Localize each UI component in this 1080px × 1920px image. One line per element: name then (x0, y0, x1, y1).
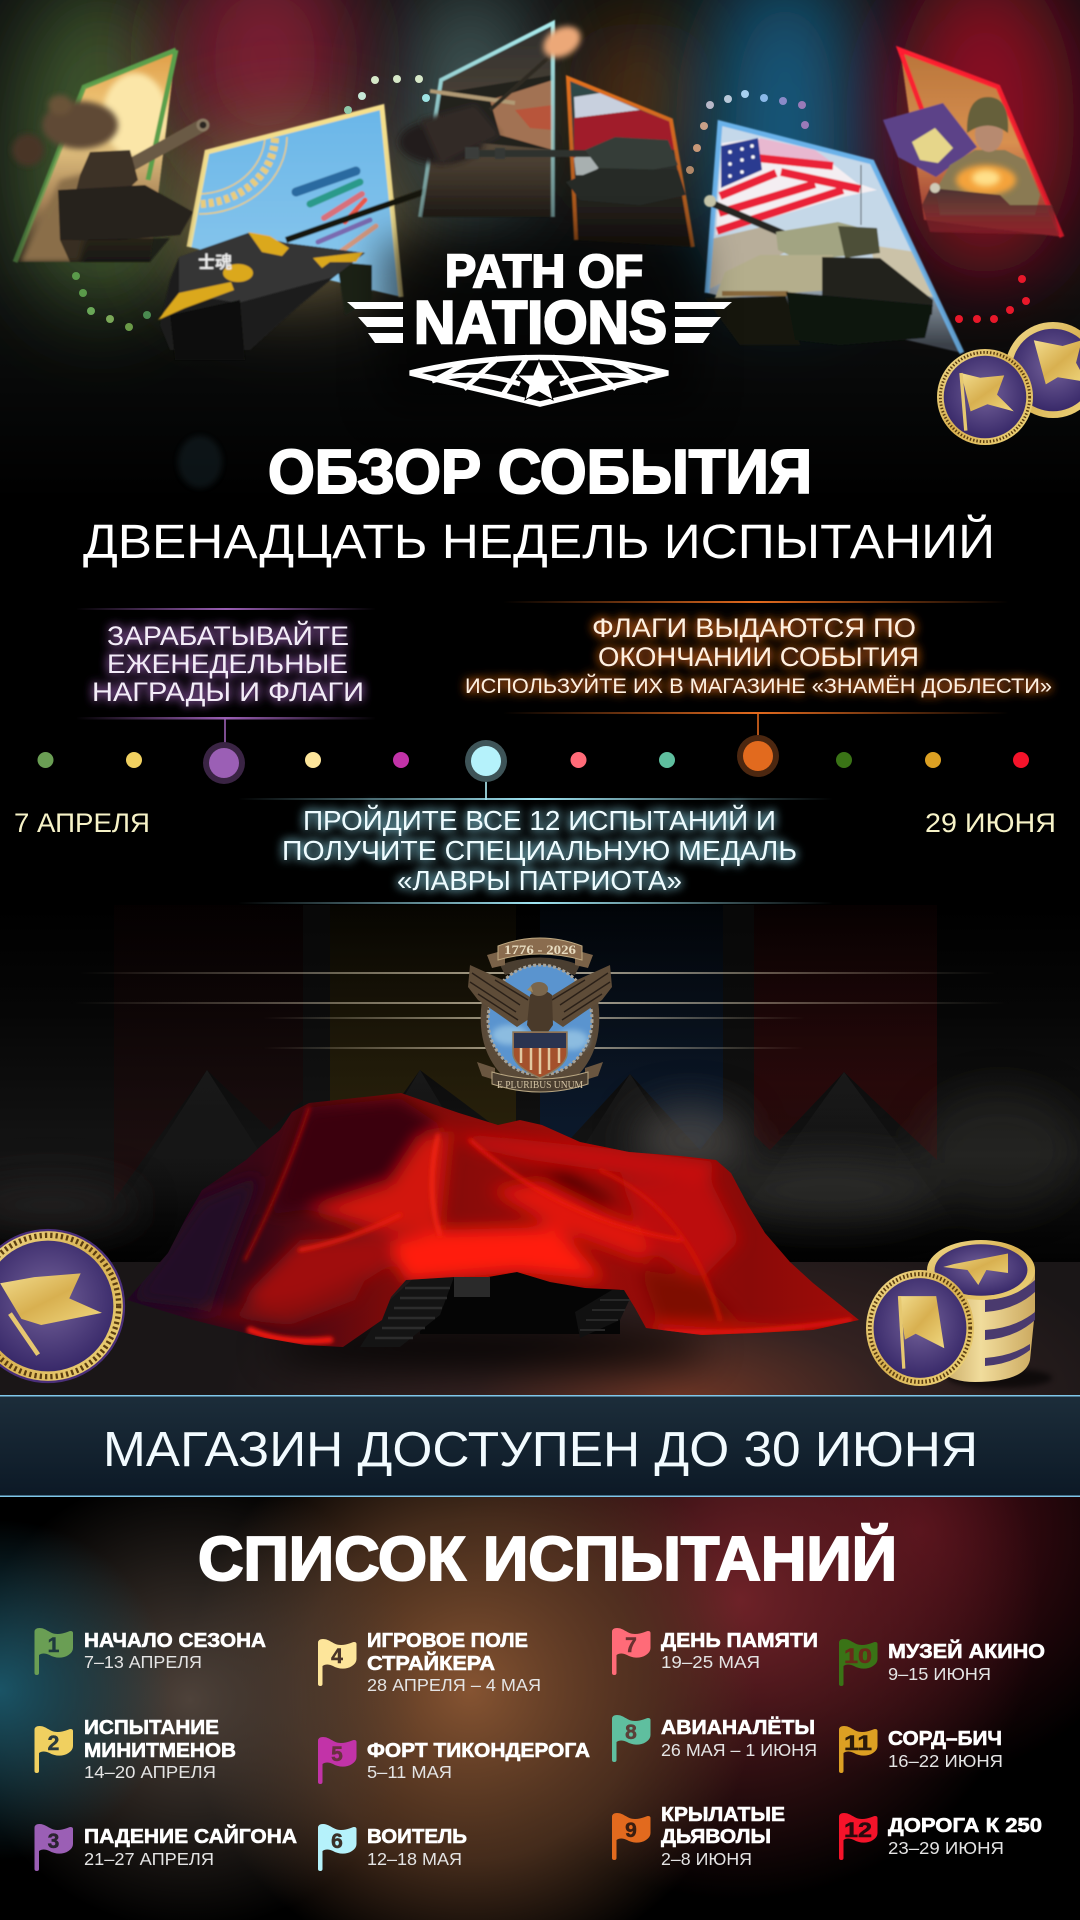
wreath (481, 1000, 599, 1086)
challenge 7: 19–25 МАЯ (661, 1652, 760, 1672)
logo emblem with star (410, 356, 668, 404)
hero card: yellow with black and gold tank: 士魂 (198, 248, 232, 273)
callout text: ОКОНЧАНИИ СОБЫТИЯ (598, 642, 919, 672)
rope ring and sky oval (488, 965, 592, 1075)
callout text: ЗАРАБАТЫВАЙТЕ (107, 620, 349, 651)
challenge 6: ВОИТЕЛЬ (367, 1826, 467, 1848)
banner (883, 103, 977, 177)
flag 3: 3 (48, 1830, 59, 1853)
hero decorative dot arcs (72, 75, 1030, 488)
covered tank (120, 1085, 870, 1370)
challenge 7: ДЕНЬ ПАМЯТИ (661, 1630, 818, 1652)
eagle left wing (468, 965, 532, 1027)
challenge 1: НАЧАЛО СЕЗОНА (84, 1630, 266, 1652)
banner text: МАГАЗИН ДОСТУПЕН ДО 30 ИЮНЯ (103, 1423, 978, 1477)
coin stack (866, 1240, 1052, 1388)
front coin (937, 349, 1033, 445)
challenge 5: 5–11 МАЯ (367, 1762, 452, 1782)
challenge 4: 28 АПРЕЛЯ – 4 МАЯ (367, 1675, 541, 1695)
large left coin (0, 1230, 124, 1382)
challenge 6: 12–18 МАЯ (367, 1849, 462, 1869)
callout text: ФЛАГИ ВЫДАЮТСЯ ПО (592, 613, 916, 643)
timeline dots (38, 735, 1029, 784)
top scroll (487, 938, 593, 968)
start date: 7 АПРЕЛЯ (14, 808, 150, 838)
callout text: ЕЖЕНЕДЕЛЬНЫЕ (107, 649, 348, 679)
challenge 9: ДЬЯВОЛЫ (661, 1826, 771, 1848)
scene backdrop with banners (0, 905, 1080, 1263)
challenge 9: КРЫЛАТЫЕ (661, 1804, 785, 1826)
reward scene (0, 905, 1080, 1396)
flag 8 (612, 1715, 650, 1762)
challenge 2 (34, 1717, 236, 1782)
callout text: ПОЛУЧИТЕ СПЕЦИАЛЬНУЮ МЕДАЛЬ (282, 835, 797, 866)
challenge 5 (318, 1737, 590, 1784)
challenge 8: АВИАНАЛЁТЫ (661, 1716, 815, 1739)
connectors (225, 713, 758, 800)
american flag (716, 138, 877, 235)
gold meander ring (199, 137, 287, 214)
flag 8: 8 (625, 1721, 637, 1744)
challenge list section (0, 1497, 1080, 1920)
challenge 7 (612, 1628, 818, 1675)
cloth folds (130, 1098, 855, 1336)
soldier tank (922, 188, 1060, 235)
hero card: yellow with black and gold tank (158, 103, 424, 351)
stack front coin (866, 1270, 974, 1386)
callout text: «ЛАВРЫ ПАТРИОТА» (397, 865, 682, 896)
stack shadow (948, 1368, 1052, 1388)
hero card: red with soldier (883, 50, 1062, 237)
heading: challenge list: СПИСОК ИСПЫТАНИЙ (198, 1524, 897, 1594)
backdrop triangles (115, 1070, 960, 1230)
challenge 2: МИНИТМЕНОВ (84, 1740, 236, 1762)
callout text: ПРОЙДИТЕ ВСЕ 12 ИСПЫТАНИЙ И (303, 805, 776, 836)
challenge 4: ИГРОВОЕ ПОЛЕ (367, 1630, 528, 1652)
flag 4: 4 (331, 1645, 343, 1668)
stack column (927, 1270, 1035, 1382)
challenge 4 (318, 1630, 541, 1695)
challenge 5: ФОРТ ТИКОНДЕРОГА (367, 1740, 590, 1762)
hero card: orange with red flag and dark tank (465, 78, 693, 247)
logo wordmark NATIONS: NATIONS (414, 289, 667, 356)
hero section (0, 0, 1080, 540)
challenge 6 (318, 1824, 467, 1871)
flag 9 (612, 1813, 650, 1860)
callout text: НАГРАДЫ И ФЛАГИ (92, 677, 364, 707)
flag 7: 7 (625, 1634, 637, 1657)
flag 1: 1 (48, 1634, 60, 1657)
stack top coin (927, 1240, 1035, 1300)
flag 3 (34, 1824, 73, 1871)
flag 10: 10 (844, 1645, 872, 1668)
smoke (0, 1090, 1080, 1230)
flag 12: 12 (844, 1819, 872, 1842)
challenge 11: СОРД–БИЧ (888, 1728, 1002, 1750)
medal lines (70, 972, 1010, 1049)
challenge 11 (839, 1726, 1003, 1773)
title: event overview: ОБЗОР СОБЫТИЯ (268, 438, 812, 507)
challenge 10: МУЗЕЙ АКИНО (888, 1639, 1045, 1663)
top scroll: 1776 - 2026 (504, 942, 577, 957)
shield (513, 1032, 567, 1078)
red cloth (120, 1085, 870, 1355)
challenge 11: 16–22 ИЮНЯ (888, 1751, 1003, 1771)
challenge 3 (34, 1824, 297, 1871)
tank tracks under cloth (360, 1272, 634, 1347)
floor shadow (270, 1326, 710, 1370)
tank body (337, 262, 372, 315)
hero card: green (12, 50, 210, 262)
challenge 10 (839, 1639, 1045, 1686)
challenge 12: 23–29 ИЮНЯ (888, 1838, 1004, 1858)
callout: complete all challenges (238, 798, 833, 904)
callout text (465, 613, 1052, 698)
challenge 9: 2–8 ИЮНЯ (661, 1849, 752, 1869)
timeline (14, 713, 1056, 838)
callout text: ИСПОЛЬЗУЙТЕ ИХ В МАГАЗИНЕ «ЗНАМЁН ДОБЛЕСТИ» (465, 674, 1052, 698)
flag 4 (318, 1639, 356, 1686)
hero card: teal with firing tank (399, 20, 586, 217)
top coins (937, 322, 1080, 445)
bottom scroll: E PLURIBUS UNUM (497, 1080, 583, 1091)
cloth highlight streaks (245, 1108, 850, 1341)
challenge 4: СТРАЙКЕРА (367, 1651, 495, 1675)
flag 6: 6 (331, 1830, 343, 1853)
floor (0, 1262, 1080, 1396)
challenge 3: 21–27 АПРЕЛЯ (84, 1849, 214, 1869)
back coin (1005, 322, 1080, 418)
hero card: blue with american flag and sherman tank (704, 123, 962, 353)
callout: flags after the event (465, 601, 1052, 714)
logo wordmark top line: PATH OF (445, 245, 643, 297)
logo wing stripes (347, 302, 732, 343)
flag 10 (839, 1639, 878, 1686)
soldier (936, 150, 1040, 215)
flag 5 (318, 1737, 356, 1784)
sherman tank (704, 195, 933, 345)
challenge 9 (612, 1804, 785, 1869)
flag 11: 11 (844, 1732, 872, 1755)
flag 12 (839, 1813, 878, 1860)
subtitle: twelve weeks of challenges: ДВЕНАДЦАТЬ НЕДЕЛЬ ИСПЫТАНИЙ (83, 514, 995, 569)
flag 7 (612, 1628, 650, 1675)
challenge 1 (34, 1628, 266, 1675)
challenge 12: ДОРОГА К 250 (888, 1815, 1042, 1837)
koi streamers (296, 171, 376, 252)
challenge 8 (612, 1715, 817, 1762)
hero coloured light glows (0, 0, 1080, 540)
flag 9: 9 (625, 1819, 637, 1842)
callout: weekly rewards (76, 608, 376, 720)
challenge 2: ИСПЫТАНИЕ (84, 1717, 219, 1739)
flag 2: 2 (48, 1732, 59, 1755)
challenge 8: 26 МАЯ – 1 ИЮНЯ (661, 1740, 817, 1760)
challenge 1: 7–13 АПРЕЛЯ (84, 1652, 202, 1672)
banner: shop availability (0, 1395, 1080, 1497)
bottom scroll (477, 1062, 603, 1092)
end date: 29 ИЮНЯ (925, 808, 1056, 838)
flag 2 (34, 1726, 73, 1773)
challenge 3: ПАДЕНИЕ САЙГОНА (84, 1824, 297, 1848)
eagle body and head (527, 990, 553, 1032)
medal: eagle and shield (468, 938, 612, 1092)
challenge 2: 14–20 АПРЕЛЯ (84, 1762, 216, 1782)
flag 1 (34, 1628, 73, 1675)
flag 5: 5 (331, 1743, 343, 1766)
challenge 10: 9–15 ИЮНЯ (888, 1664, 991, 1684)
section background glow (0, 1497, 1080, 1920)
flag 11 (839, 1726, 878, 1773)
callout text (92, 620, 364, 707)
logo: Path of Nations (347, 240, 732, 410)
callout text (282, 805, 797, 896)
eagle right wing (548, 965, 612, 1027)
challenge 12 (839, 1813, 1042, 1860)
flag 6 (318, 1824, 356, 1871)
